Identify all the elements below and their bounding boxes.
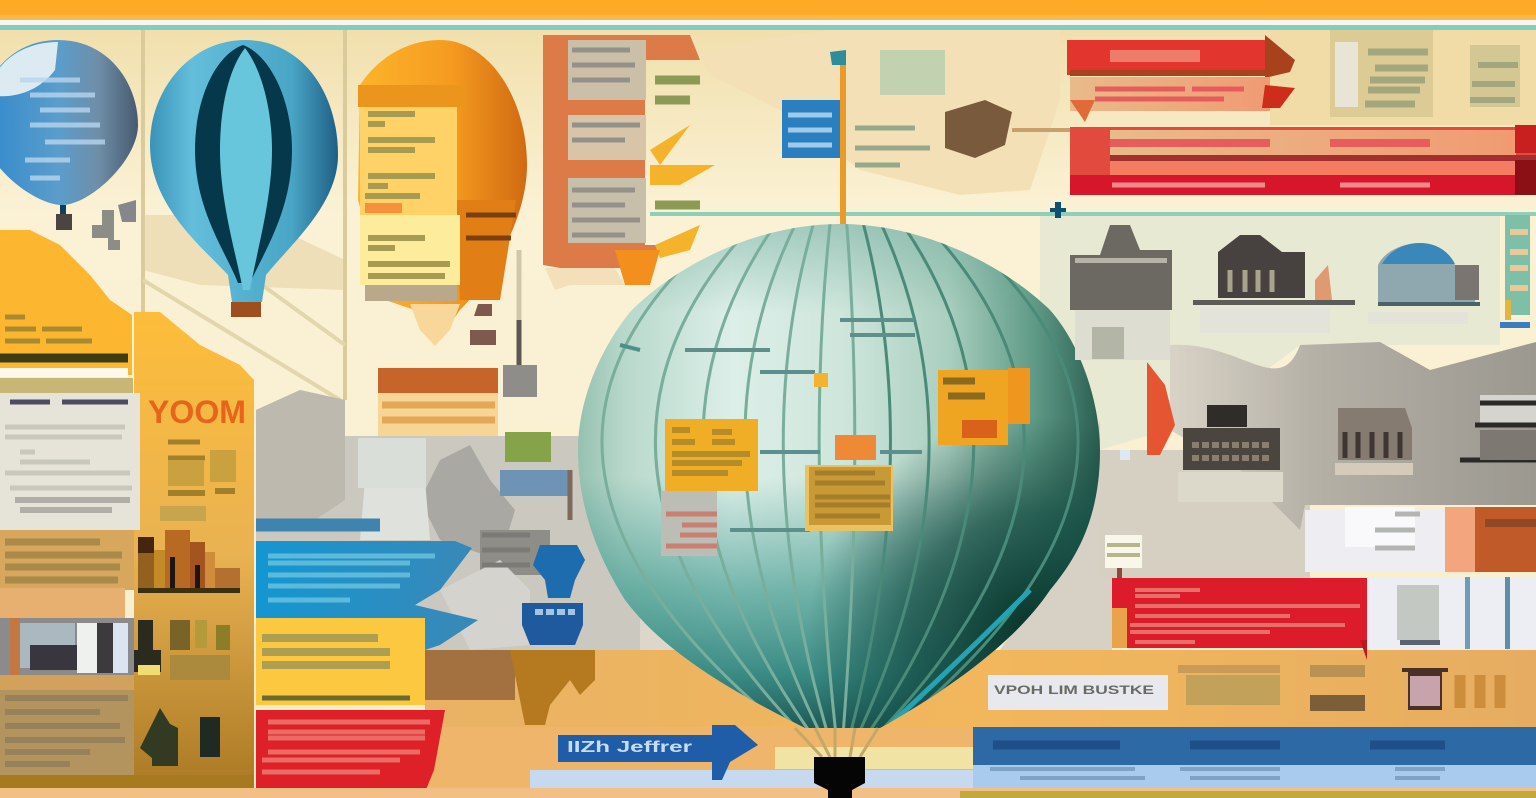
blue arrow label: IIZh Jeffrer <box>567 739 692 756</box>
icon: dark figures <box>140 708 220 766</box>
icon: pink jar <box>1402 668 1500 710</box>
sand ground band <box>425 650 1536 788</box>
white label box <box>988 675 1168 710</box>
marker on teal line <box>1050 202 1066 218</box>
card: mid orange text panel <box>378 250 537 436</box>
blue arrow label <box>558 725 758 780</box>
building: steps <box>1460 395 1536 460</box>
grey mountains <box>256 390 640 650</box>
column: side legend <box>1500 215 1530 328</box>
icon: red flag <box>1147 362 1175 455</box>
background tan shapes and guide lines <box>143 30 1536 450</box>
beige haze beside main balloon <box>580 420 1112 650</box>
building: domed grey <box>1070 225 1172 360</box>
building: dark hall <box>1178 405 1283 502</box>
top orange band <box>0 0 1536 30</box>
yellow card <box>256 618 425 705</box>
buildings upper row <box>1070 215 1530 360</box>
balloon: blue globe <box>0 40 138 250</box>
top pole with blue flags <box>782 50 945 238</box>
left column: lower tan text panel <box>0 675 254 798</box>
icon: blue globe and box <box>522 545 585 645</box>
white label box: VPOH LIM BUSTKE <box>994 683 1154 697</box>
card: grey with red lines <box>661 491 717 556</box>
left column: photo strip <box>0 618 134 675</box>
brown band <box>425 650 595 725</box>
connector lines on balloon <box>620 320 922 530</box>
card: amber upper right <box>938 368 1030 445</box>
building: dark columns <box>1193 235 1355 333</box>
red banner bottom left <box>256 710 445 792</box>
left yellow blob panels <box>0 230 254 798</box>
building: blue dome <box>1368 243 1480 324</box>
icon: books <box>138 530 240 593</box>
left column: heading word: YOOM <box>148 394 246 430</box>
lamp label <box>1105 450 1142 580</box>
balloon: striped teal <box>150 40 338 317</box>
left column: white text panel <box>0 368 140 530</box>
blue footer band <box>0 727 1536 798</box>
card: yellow left <box>665 419 758 491</box>
red banner top right <box>1067 35 1295 122</box>
blue arrow banner <box>256 541 478 650</box>
red banner lower right <box>1112 578 1367 660</box>
icon: brown gear node <box>945 100 1070 158</box>
upper centre flowchart panel <box>543 35 715 290</box>
building: columned hall <box>1335 408 1413 475</box>
balloon: orange with document <box>358 40 527 346</box>
top right documents <box>1330 30 1520 117</box>
khaki text blocks <box>1178 665 1365 711</box>
white docs with peach panel <box>1305 507 1536 572</box>
document on balloon <box>358 85 466 301</box>
left column: small text blocks <box>160 442 236 521</box>
node: yellow dot <box>814 373 828 387</box>
balloon ropes and basket <box>795 728 878 798</box>
icon row: bottles and text <box>134 620 230 680</box>
grey haze and cloud right <box>1100 342 1536 578</box>
tab: orange <box>835 435 876 460</box>
main balloon <box>570 215 1110 735</box>
buildings lower row <box>1178 395 1536 502</box>
white panels lower right <box>1367 577 1536 649</box>
card: centre amber <box>805 465 893 531</box>
large red banner right <box>1070 125 1536 195</box>
left column: tan text panel <box>0 530 134 618</box>
